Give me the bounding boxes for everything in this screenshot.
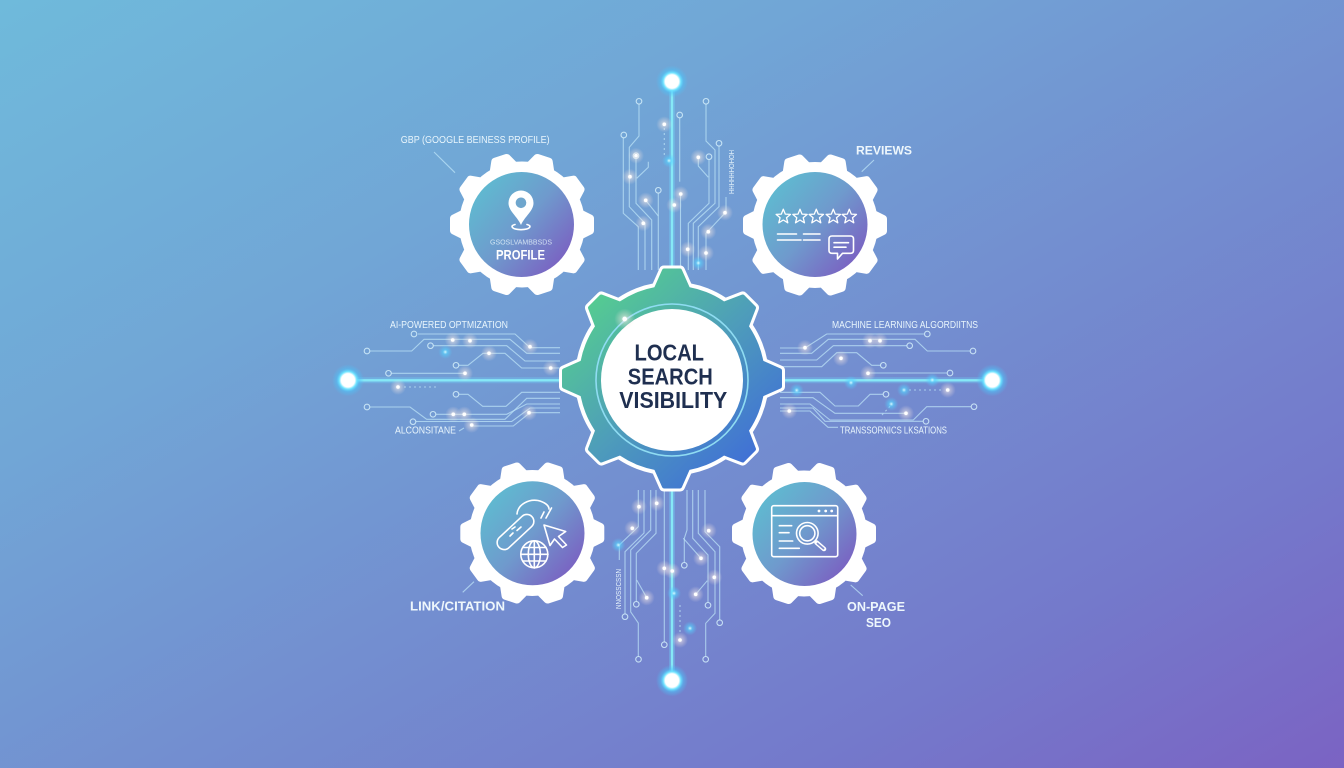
- label: on-page SEO: [847, 585, 905, 630]
- label: right lower circuit caption: TRANSSORNICS LKSATIONS: [840, 425, 947, 436]
- vertical micro text: top: HOHOHHHHHH: [727, 150, 734, 194]
- icon: chain link, cursor and globe: [494, 500, 566, 568]
- panel: link/citation gear: [464, 465, 600, 601]
- main bus lines with glowing end nodes: [332, 66, 1008, 696]
- panel: GBP gear: [454, 157, 590, 292]
- label: left lower circuit caption: ALCONSITANE: [395, 426, 456, 437]
- icon: review text lines: [778, 234, 820, 240]
- label: AI-powered optimization: AI-POWERED OPTMIZATION: [390, 320, 508, 331]
- label: GBP: [401, 135, 550, 173]
- profile micro text: GSOSLVAMBBSDS: [490, 238, 552, 246]
- label: reviews: REVIEWS: [856, 144, 912, 158]
- label: link/citation: LINK/CITATION: [410, 598, 505, 613]
- panel: on-page SEO gear: [736, 466, 872, 601]
- profile label: PROFILE: [496, 247, 545, 263]
- icon: browser window with magnifier: [772, 506, 838, 557]
- central title: VISIBILITY: [619, 387, 727, 413]
- circuit traces: bottom: [619, 490, 722, 662]
- central title: LOCAL: [635, 340, 704, 366]
- panel: reviews gear: [747, 157, 883, 293]
- circuit traces: top: [621, 98, 726, 270]
- label: machine learning algorithms: MACHINE LEARNING ALGORDIITNS: [832, 320, 978, 331]
- label: on-page SEO: SEO: [866, 615, 891, 630]
- icon: five stars: [776, 209, 856, 223]
- label: reviews: [856, 144, 912, 172]
- vertical micro text: bottom: NNOSSCSSN: [616, 569, 623, 609]
- icon: map pin: [508, 190, 534, 230]
- label: link/citation: [410, 582, 505, 613]
- label: GBP: GBP (GOOGLE BEINESS PROFILE): [401, 135, 550, 146]
- label: on-page SEO: ON-PAGE: [847, 599, 905, 614]
- glowing sparks along traces: [390, 116, 956, 648]
- icon: speech bubble: [829, 236, 854, 259]
- central title: SEARCH: [628, 364, 713, 390]
- circuit traces: left: [364, 331, 560, 426]
- panel: central gear: [559, 266, 785, 492]
- circuit traces: right: [780, 331, 977, 427]
